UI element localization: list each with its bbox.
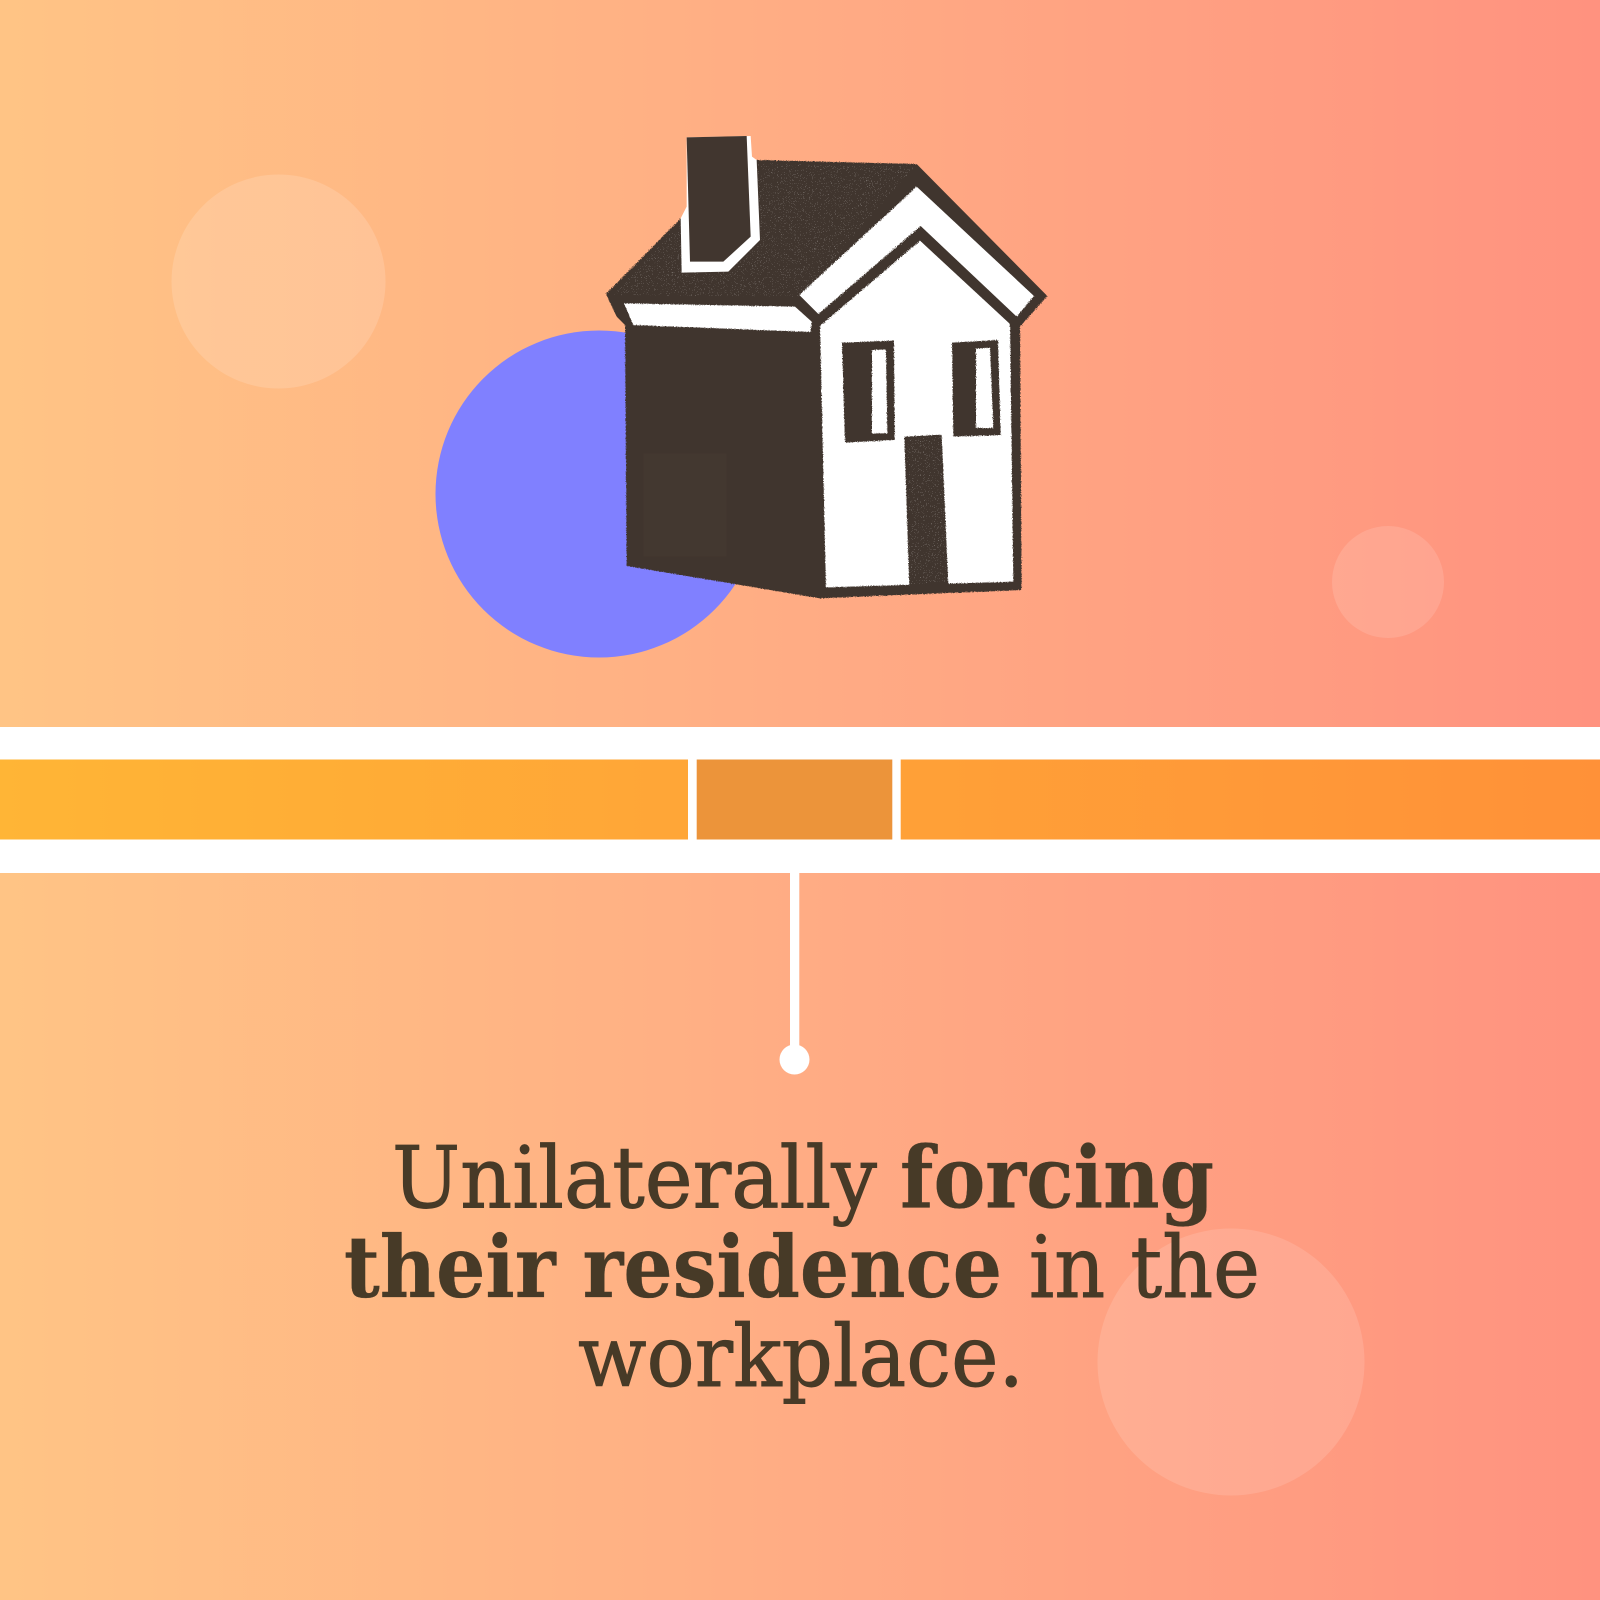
house dark silhouette (606, 160, 1047, 598)
door speckle texture (906, 437, 947, 584)
gable band (799, 187, 1034, 317)
icon: house (606, 136, 1047, 598)
orange bar: right segment (901, 760, 1600, 840)
right window (952, 340, 1001, 437)
left eave (624, 303, 812, 332)
front wall (820, 241, 1013, 587)
caption text: in the (1029, 1219, 1260, 1318)
lower side panel shade (643, 453, 727, 557)
decorative circle: bottom right (1098, 1228, 1364, 1496)
blue circle behind house (436, 330, 762, 658)
orange bar: highlighted center segment (697, 760, 892, 840)
connector line and dot (780, 872, 810, 1074)
decorative circle: top left (172, 174, 386, 388)
caption text (344, 1128, 1260, 1407)
orange bar: left segment (0, 760, 688, 840)
door (904, 435, 948, 587)
chimney (681, 136, 760, 273)
caption text: their residence (344, 1218, 1002, 1318)
white band behind orange bar (0, 727, 1600, 873)
caption text: Unilaterally (392, 1130, 877, 1228)
caption text: workplace. (578, 1308, 1024, 1407)
decorative circle: right (1332, 526, 1444, 638)
roof speckle texture (613, 163, 915, 297)
caption text: forcing (900, 1128, 1214, 1228)
left window (842, 341, 895, 443)
